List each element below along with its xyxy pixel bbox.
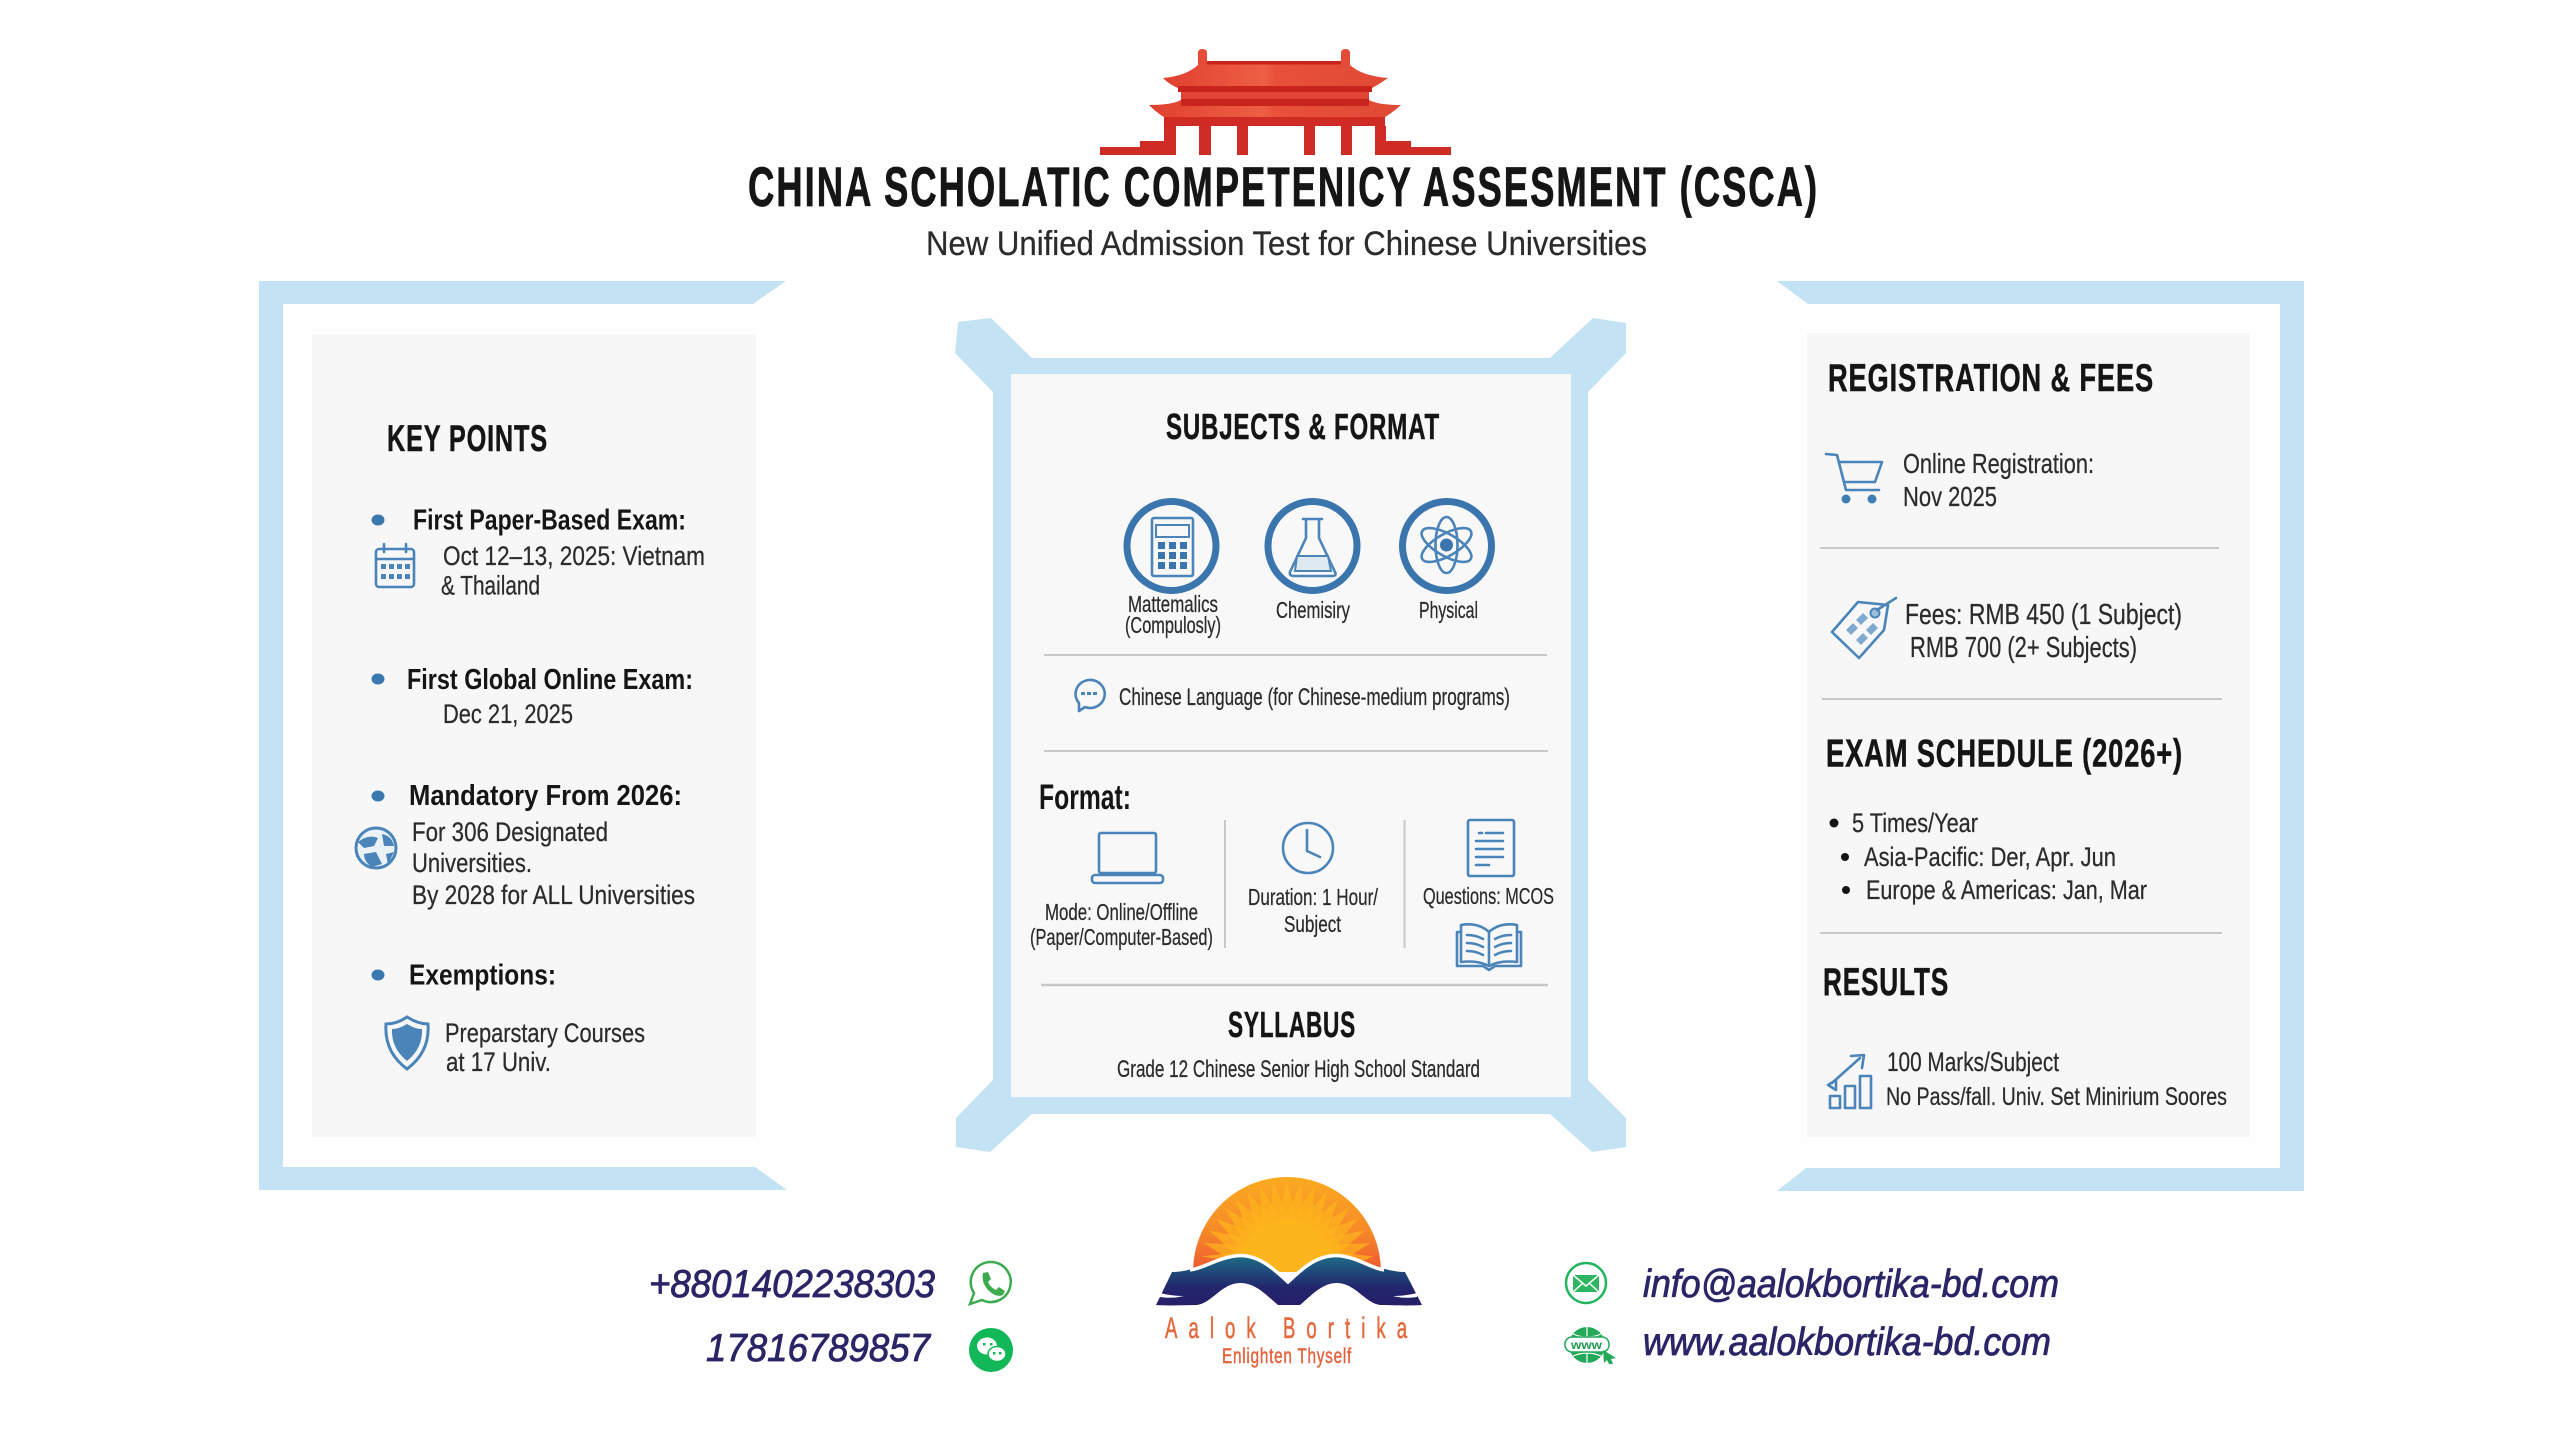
text: duration xyxy=(1248,884,1378,937)
key point: exemptions: Exemptions: xyxy=(409,960,556,992)
heading: syllabus: SYLLABUS xyxy=(1228,1004,1356,1045)
text: duration: Subject xyxy=(1284,911,1341,937)
list: exam schedule: Europe & Americas: Jan, Mar xyxy=(1866,875,2147,905)
icon: cart xyxy=(1826,454,1882,504)
right panel background xyxy=(1807,333,2250,1137)
key point: first global online exam xyxy=(372,664,693,729)
logo: aalok bortika xyxy=(1156,1170,1422,1368)
text: duration: Duration: 1 Hour/ xyxy=(1248,884,1378,910)
icon: atom xyxy=(1402,502,1492,590)
icon: flask xyxy=(1268,502,1357,590)
text: questions: Questions: MCOS xyxy=(1423,883,1554,909)
icon: website globe: www xyxy=(1570,1338,1603,1352)
list: exam schedule: Asia-Pacific: Der, Apr. Jun xyxy=(1864,842,2116,872)
heading: subjects and format: SUBJECTS & FORMAT xyxy=(1166,406,1440,447)
heading: exam schedule: EXAM SCHEDULE (2026+) xyxy=(1826,732,2183,776)
heading: format: Format: xyxy=(1039,778,1131,817)
icon: website globe xyxy=(1565,1327,1616,1364)
label: chemistry: Chemisiry xyxy=(1276,597,1350,623)
label: mathematics: (Compulosly) xyxy=(1125,612,1221,638)
panel: key points xyxy=(259,281,787,1190)
icon: calendar xyxy=(376,544,414,587)
icon: speech bubble xyxy=(1076,680,1105,711)
left panel background xyxy=(312,334,756,1137)
logo sun xyxy=(1193,1177,1381,1272)
text: online registration: Nov 2025 xyxy=(1903,481,1997,512)
text: fees: RMB 700 (2+ Subjects) xyxy=(1910,632,2137,664)
panel: registration, schedule and results xyxy=(1777,281,2304,1191)
contact: phone numbers xyxy=(649,1263,935,1370)
subtitle: New Unified Admission Test for Chinese Universities xyxy=(926,225,1647,263)
text: syllabus detail: Grade 12 Chinese Senior High School Standard xyxy=(1117,1056,1480,1083)
logo open book waves xyxy=(1156,1256,1422,1305)
heading: key points: KEY POINTS xyxy=(387,418,548,459)
icon: calculator xyxy=(1127,502,1216,590)
text: chinese language: Chinese Language (for Chinese-medium programs) xyxy=(1119,684,1510,711)
text: results detail xyxy=(1886,1047,2227,1111)
text: online registration xyxy=(1903,448,2094,512)
key point: mandatory from 2026: For 306 Designated xyxy=(412,817,608,847)
list: exam schedule xyxy=(1830,808,2147,905)
icon: open book xyxy=(1457,924,1521,970)
icon: price tag xyxy=(1832,598,1896,658)
icon: document xyxy=(1468,820,1514,876)
key point: first paper-based exam: Oct 12–13, 2025: Vietnam xyxy=(443,541,705,571)
icon: globe xyxy=(356,828,396,868)
contact: email and website: info@aalokbortika-bd.com xyxy=(1643,1263,2059,1306)
text: fees xyxy=(1905,599,2182,664)
text: mode: Mode: Online/Offline xyxy=(1045,899,1198,925)
centre frame xyxy=(955,318,1626,1152)
contact: email and website: www.aalokbortika-bd.com xyxy=(1643,1321,2051,1364)
icon: email xyxy=(1566,1263,1606,1303)
icon: wechat xyxy=(969,1328,1013,1372)
icon: laptop xyxy=(1092,833,1163,883)
right frame xyxy=(1777,281,2304,1191)
left frame xyxy=(259,281,787,1190)
key point: exemptions: Preparstary Courses xyxy=(445,1018,645,1048)
text: mode xyxy=(1030,899,1213,950)
icon: clock xyxy=(1283,823,1333,873)
text: mode: (Paper/Computer-Based) xyxy=(1030,924,1213,950)
key point: first paper-based exam: & Thailand xyxy=(441,570,540,600)
key point: exemptions xyxy=(372,960,645,1077)
key point: first global online exam: First Global Online Exam: xyxy=(407,664,693,696)
logo wordmark: Aalok Bortika xyxy=(1165,1312,1418,1345)
text: results detail: 100 Marks/Subject xyxy=(1887,1047,2059,1077)
icon: red pagoda xyxy=(1100,49,1451,155)
text: results detail: No Pass/fall. Univ. Set Minirium Soores xyxy=(1886,1083,2227,1111)
panel: subjects and format xyxy=(955,318,1626,1152)
heading: registration and fees: REGISTRATION & FEES xyxy=(1828,357,2154,400)
key point: mandatory from 2026: By 2028 for ALL Universities xyxy=(412,880,695,910)
list: exam schedule: 5 Times/Year xyxy=(1852,808,1978,838)
label: mathematics xyxy=(1125,591,1221,638)
key point: mandatory from 2026: Universities. xyxy=(412,848,532,878)
logo tagline: Enlighten Thyself xyxy=(1222,1345,1352,1368)
contact: email and website xyxy=(1643,1263,2059,1364)
title: CHINA SCHOLATIC COMPETENICY ASSESMENT (CSCA) xyxy=(748,155,1819,218)
label: mathematics: Mattemalics xyxy=(1128,591,1218,617)
contact: phone numbers: +8801402238303 xyxy=(649,1263,935,1306)
label: physics: Physical xyxy=(1419,597,1478,623)
text: online registration: Online Registration: xyxy=(1903,448,2094,479)
key point: first paper-based exam: First Paper-Based Exam: xyxy=(413,504,686,536)
icon: whatsapp xyxy=(970,1262,1011,1304)
text: fees: Fees: RMB 450 (1 Subject) xyxy=(1905,599,2182,631)
heading: results: RESULTS xyxy=(1823,961,1949,1004)
key point: exemptions: at 17 Univ. xyxy=(446,1047,551,1077)
icon: growth chart xyxy=(1828,1055,1871,1108)
icon: shield xyxy=(386,1017,428,1069)
key point: mandatory from 2026: Mandatory From 2026: xyxy=(409,780,682,812)
key point: mandatory from 2026 xyxy=(372,780,695,910)
key point: first paper-based exam xyxy=(372,504,705,600)
centre panel background xyxy=(1011,374,1571,1097)
contact: phone numbers: 17816789857 xyxy=(706,1327,931,1370)
key point: first global online exam: Dec 21, 2025 xyxy=(443,699,573,729)
